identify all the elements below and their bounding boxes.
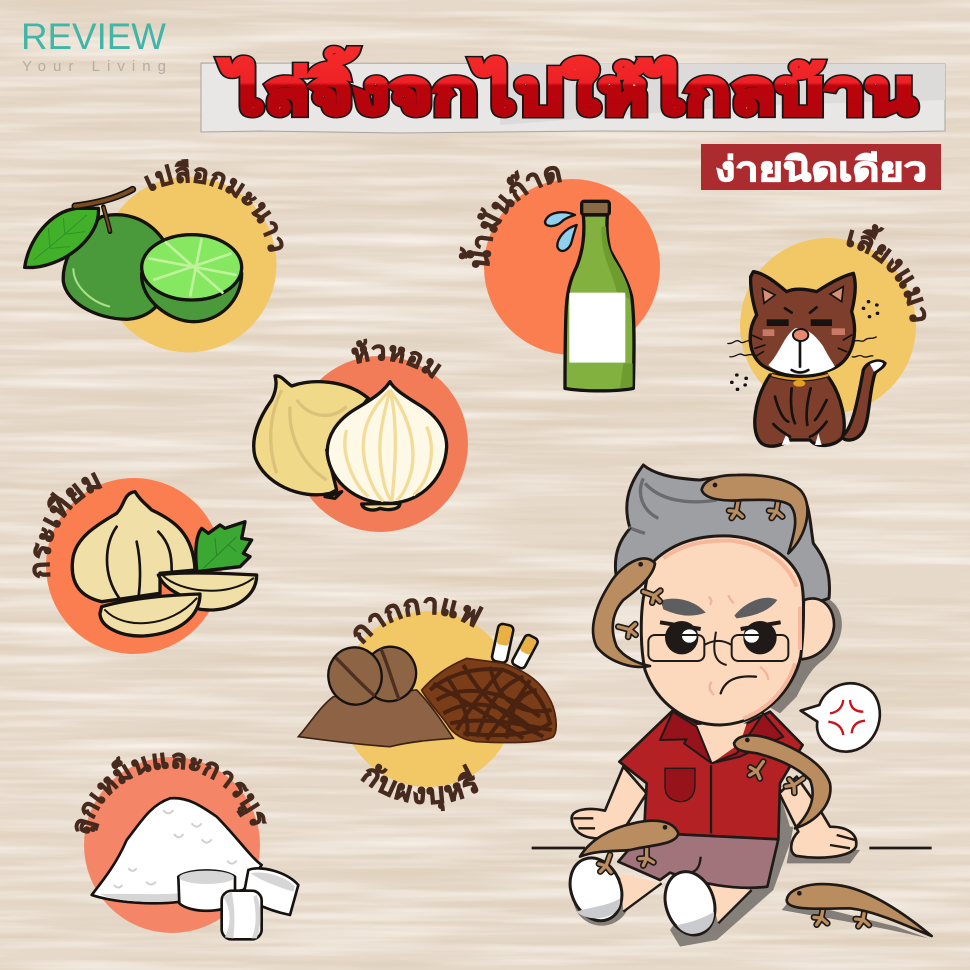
panel: kerosene: [458, 166, 660, 392]
title banner: ไล่จิ้งจกไปให้ไกลบ้าน: [219, 48, 916, 126]
lizard on leg: [580, 821, 678, 873]
arms: [572, 767, 856, 858]
shadows: [573, 598, 928, 947]
icon: shallots: [254, 376, 447, 510]
speech bubble: [801, 683, 880, 752]
label: shallots: หัวหอม: [351, 338, 442, 380]
shirt: [619, 710, 803, 839]
shorts: [618, 833, 778, 888]
head: [641, 536, 804, 725]
character: angry old man with lizards: [532, 465, 932, 947]
icon: garlic: [72, 492, 257, 636]
label: mothballs and camphor: ลูกเหม็นและการบูร: [74, 752, 267, 834]
right ear: [801, 598, 834, 659]
panel: keep a cat: [727, 224, 926, 448]
legs: [620, 873, 752, 923]
floor lines: [532, 844, 932, 852]
title banner: [201, 48, 945, 133]
label: garlic: กระเทียม: [32, 472, 102, 578]
logo: Your Living: [22, 58, 166, 75]
lizard on shoulder: [734, 735, 830, 828]
logo: [21, 16, 166, 75]
label: lime peel: เปลือกมะนาว: [144, 159, 284, 252]
panel: coffee and tobacco: [296, 596, 557, 812]
panel: garlic: [32, 472, 258, 654]
label: coffee grounds: กากกาแฟ: [353, 596, 484, 644]
lizard on forehead: [593, 558, 662, 667]
label: kerosene: น้ำมันก๊าด: [458, 166, 562, 268]
icon: coffee and tobacco: [298, 623, 556, 747]
lizard on floor: [787, 884, 932, 936]
icon: lime: [25, 189, 242, 322]
logo: REVIEW: [21, 16, 166, 57]
icon: cat: [727, 272, 885, 446]
face: [648, 595, 788, 695]
title banner: ไล่จิ้งจกไปให้ไกลบ้าน: [219, 48, 916, 126]
label: with tobacco: กับผงบุหรี่: [360, 764, 478, 812]
panel: shallots: [252, 338, 468, 532]
subtitle badge: [701, 144, 941, 190]
icon: mothballs: [92, 798, 298, 939]
panel: lime peel: [23, 159, 284, 352]
panel: mothballs and camphor: [74, 752, 300, 941]
subtitle badge: ง่ายนิดเดียว: [715, 151, 927, 189]
lizard on hair: [702, 475, 807, 553]
label: keep a cat: เลี้ยงแมว: [846, 224, 926, 322]
socks: [561, 850, 723, 941]
icon: bottle: [545, 201, 634, 391]
hair: [615, 465, 829, 607]
